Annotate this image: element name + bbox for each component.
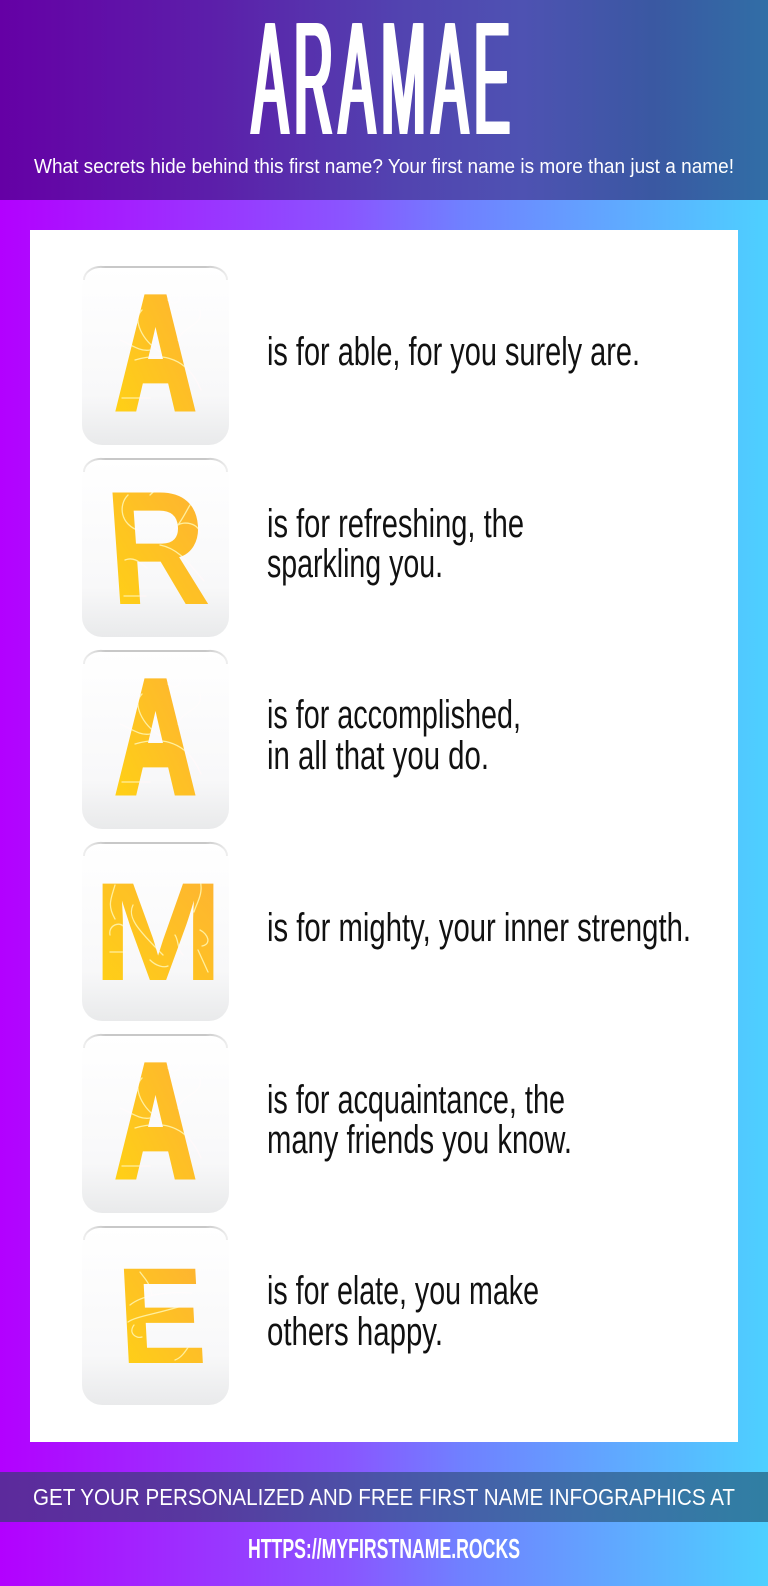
footer url: HTTPS://MYFIRSTNAME.ROCKS [248,1533,520,1564]
text: A line: many friends you know. [267,1118,572,1162]
row 4: letter M [82,843,691,1021]
icon: tile E: E [114,1240,210,1393]
icon: tile A: A [116,647,195,826]
row 6: letter E [82,1227,539,1405]
row 2: letter R [82,458,524,639]
subtitle: What secrets hide behind this first name? Your first name is more than just a name! [34,156,734,178]
text: A line [267,1078,572,1162]
text: E line [267,1269,539,1354]
text: R lines: is for refreshing, the [267,502,524,546]
text: E line: is for elate, you make [267,1269,539,1313]
text: A line: in all that you do. [267,734,489,778]
text: A line: is for acquaintance, the [267,1078,565,1122]
text: R lines [267,502,524,586]
icon: tile A: A [116,263,195,442]
text: A line: is for accomplished, [267,693,521,737]
text: R lines: sparkling you. [267,542,443,586]
icon: tile M: M [92,853,224,1010]
icon: tile A: A [116,1031,195,1210]
row 3: letter A [82,647,521,829]
text: A line: is for able, for you surely are. [267,330,640,374]
row 5: letter A [82,1031,572,1213]
text: E line: others happy. [267,1310,443,1354]
panel: white card [30,230,738,1442]
footer band [0,1472,768,1522]
icon: tile M [82,843,229,1021]
row 1: letter A [82,263,640,445]
icon: tile E [82,1227,229,1405]
header band [0,0,768,200]
icon: tile R: R [101,458,213,639]
text: A line [267,693,521,778]
